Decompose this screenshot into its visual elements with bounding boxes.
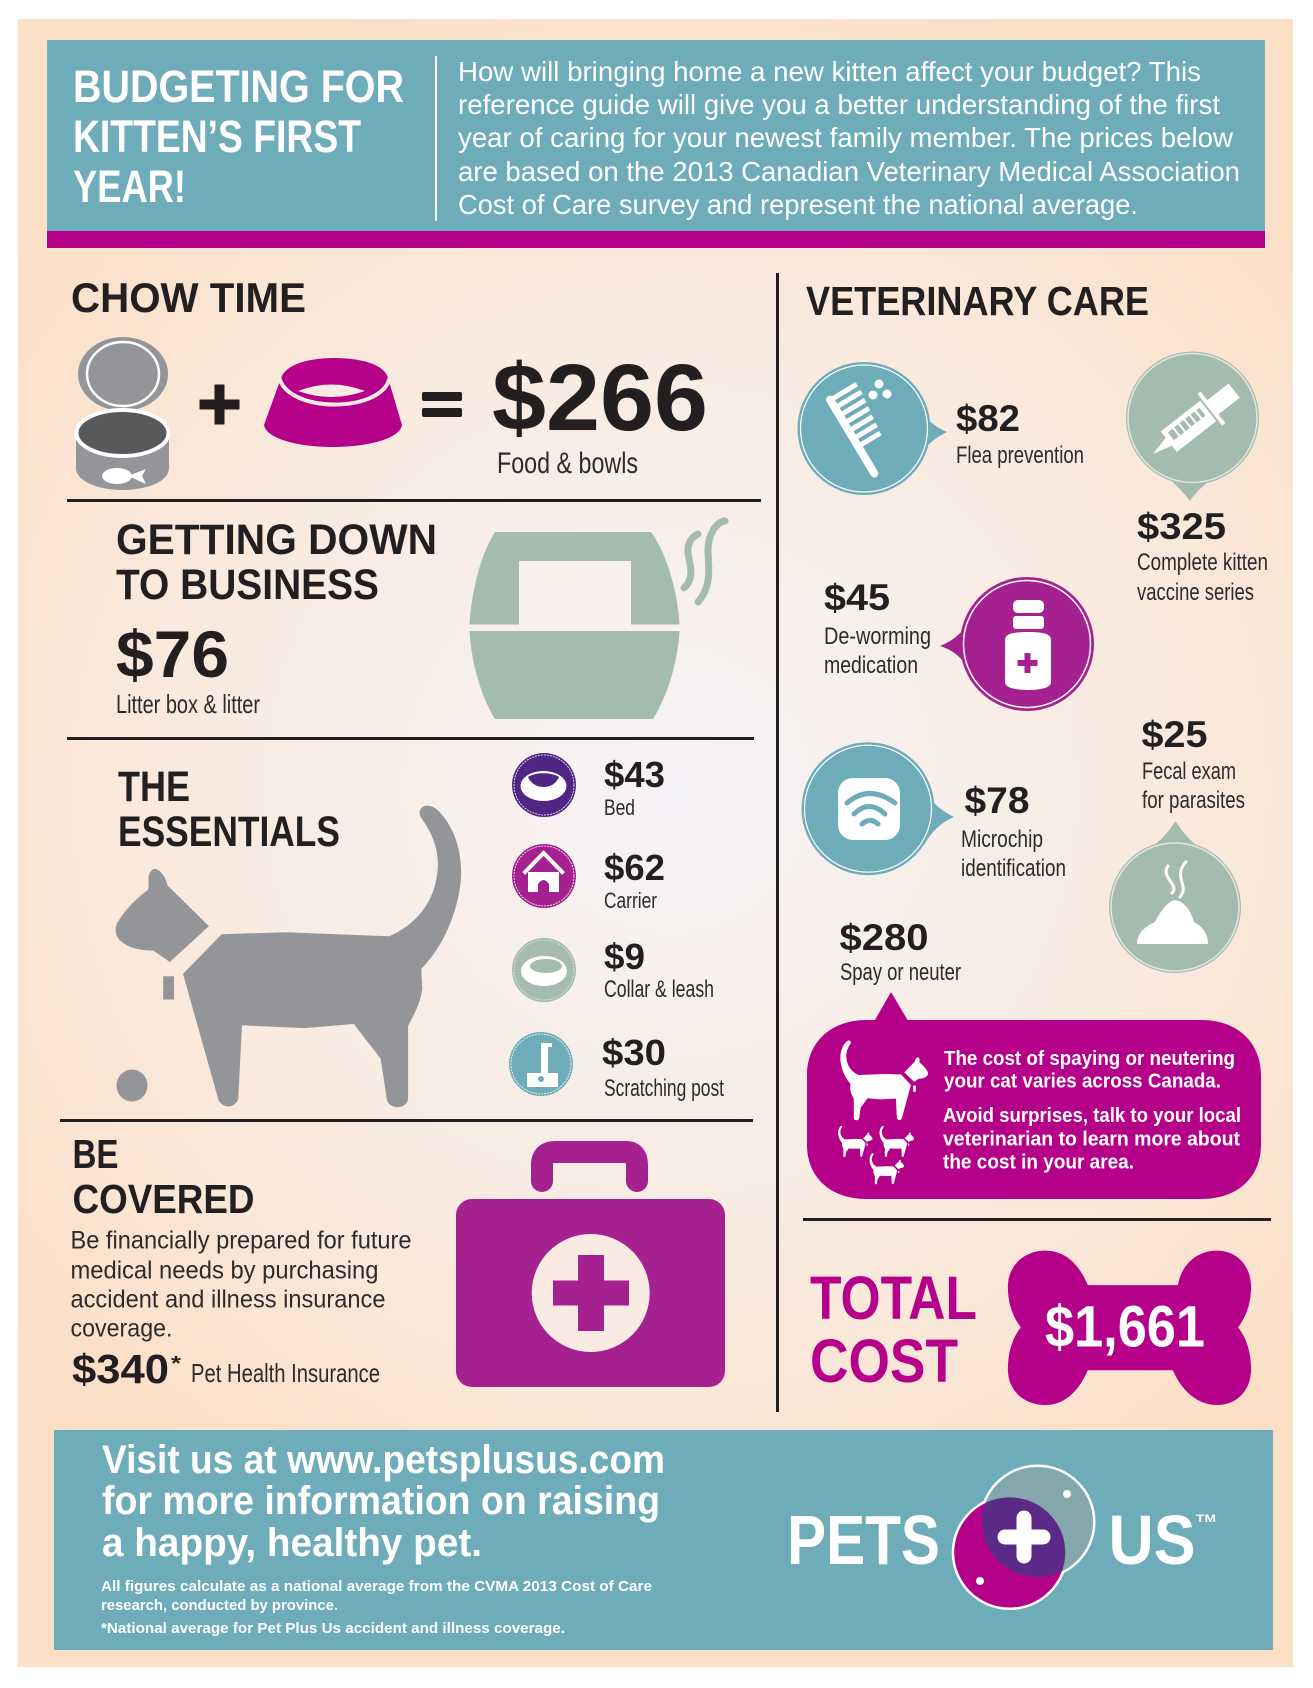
logo: pets plus us: TM <box>1196 1513 1216 1525</box>
text: insurance description: Be financially prepared for future <box>70 1226 412 1254</box>
icon: medical bag <box>456 1152 725 1387</box>
heading: be covered: COVERED <box>72 1176 254 1222</box>
logo: pets plus us: US <box>1108 1501 1196 1579</box>
text: website call to action: Visit us at www.petsplusus.com <box>102 1438 665 1482</box>
item: collar: $9 <box>604 936 645 977</box>
heading: total cost: TOTAL <box>810 1264 977 1332</box>
item: fecal exam: $25 <box>1142 714 1208 755</box>
item: bed <box>512 753 665 820</box>
text: callout message: The cost of spaying or neutering <box>944 1048 1235 1070</box>
heading: chow time: CHOW TIME <box>71 274 306 321</box>
icon: equals sign <box>422 392 462 417</box>
panel: total cost <box>810 1251 1251 1405</box>
text: website call to action <box>102 1438 665 1565</box>
item: flea prevention: Flea prevention <box>956 442 1084 469</box>
item: microchip <box>802 742 1066 882</box>
item: scratching post <box>509 1032 724 1102</box>
item: vaccine series <box>1126 352 1268 606</box>
panel: footer banner <box>54 1430 1273 1650</box>
item: microchip: $78 <box>964 780 1030 821</box>
item: de-worming medication <box>824 577 1094 711</box>
logo: pets plus us <box>787 1464 1216 1610</box>
item: de-worming medication: De-worming <box>824 623 931 650</box>
label: pet health insurance: Pet Health Insurance <box>191 1358 380 1388</box>
heading: getting down to business: TO BUSINESS <box>116 561 379 609</box>
panel: be covered <box>70 1131 725 1392</box>
icon: cat food can <box>76 337 169 490</box>
heading: the essentials <box>118 763 340 856</box>
intro text <box>458 56 1240 220</box>
text: callout message: the cost in your area. <box>943 1152 1134 1174</box>
item: collar <box>512 936 714 1003</box>
text: insurance description: accident and illness insurance <box>70 1286 386 1314</box>
item: fecal exam: for parasites <box>1142 787 1245 814</box>
intro text: reference guide will give you a better understanding of the first <box>458 89 1220 120</box>
text: insurance description: medical needs by purchasing <box>70 1256 378 1284</box>
heading: the essentials: THE <box>118 763 190 811</box>
intro text: year of caring for your newest family member. The prices below <box>458 122 1234 153</box>
divider: column rule <box>776 273 779 1412</box>
icon: plus sign <box>200 385 239 424</box>
item: carrier: Carrier <box>604 888 657 913</box>
footnote marker: * <box>171 1353 181 1375</box>
title: YEAR! <box>73 161 186 212</box>
panel: header banner <box>47 40 1265 248</box>
heading: veterinary care: VETERINARY CARE <box>806 278 1149 324</box>
panel: the essentials <box>116 753 724 1107</box>
title <box>73 61 404 212</box>
text: insurance description <box>70 1226 412 1342</box>
text: website call to action: for more information on raising <box>102 1479 660 1523</box>
item: de-worming medication: medication <box>824 652 918 679</box>
item: spay or neuter: Spay or neuter <box>840 959 961 986</box>
price: total: $1,661 <box>1045 1294 1205 1360</box>
text: footnotes: All figures calculate as a national average from the CVMA 2013 Cost of Care <box>101 1578 652 1595</box>
item: vaccine series: vaccine series <box>1137 579 1254 606</box>
item: carrier <box>512 844 665 913</box>
text: insurance description: coverage. <box>70 1314 172 1342</box>
text: callout message: veterinarian to learn more about <box>943 1128 1240 1150</box>
item: de-worming medication: $45 <box>824 577 890 618</box>
item: vaccine series: Complete kitten <box>1137 549 1268 576</box>
title: KITTEN’S FIRST <box>73 111 361 162</box>
item: fecal exam: Fecal exam <box>1142 758 1236 785</box>
label: food and bowls: Food & bowls <box>497 447 638 480</box>
panel: getting down to business <box>116 516 725 719</box>
logo: pets plus us: PETS <box>787 1501 940 1579</box>
heading: total cost: COST <box>810 1327 958 1395</box>
item: fecal exam <box>1109 714 1245 973</box>
item: microchip: Microchip <box>961 826 1043 853</box>
price: insurance: $340 <box>72 1346 169 1392</box>
text: callout message: Avoid surprises, talk to your local <box>943 1105 1241 1127</box>
item: microchip: identification <box>961 855 1066 882</box>
icon: bone <box>1008 1251 1251 1405</box>
item: flea prevention <box>798 362 1084 495</box>
text: callout message <box>943 1048 1241 1174</box>
heading: getting down to business: GETTING DOWN <box>116 516 437 564</box>
price: food: $266 <box>492 345 708 451</box>
icon: grey cat with collar <box>116 806 461 1107</box>
item: spay or neuter <box>840 917 961 986</box>
item: spay or neuter: $280 <box>840 917 928 958</box>
title: BUDGETING FOR <box>73 61 404 112</box>
text: callout message: your cat varies across Canada. <box>944 1070 1221 1092</box>
label: litter box: Litter box & litter <box>116 689 260 719</box>
heading: the essentials: ESSENTIALS <box>118 808 340 856</box>
price: litter: $76 <box>116 617 229 691</box>
heading: getting down to business <box>116 516 437 609</box>
intro text: Cost of Care survey and represent the national average. <box>458 189 1138 220</box>
icon: adult cat and kittens <box>838 1040 928 1184</box>
item: collar: Collar & leash <box>604 976 714 1003</box>
item: scratching post: $30 <box>602 1032 666 1073</box>
item: bed: Bed <box>604 795 635 820</box>
text: footnotes: *National average for Pet Plus Us accident and illness coverage. <box>101 1620 565 1637</box>
intro text: are based on the 2013 Canadian Veterinary Medical Association <box>458 156 1240 187</box>
item: scratching post: Scratching post <box>604 1075 724 1102</box>
item: bed: $43 <box>604 754 665 795</box>
intro text: How will bringing home a new kitten affect your budget? This <box>458 56 1201 87</box>
callout: spay or neuter cost <box>807 992 1261 1199</box>
text: website call to action: a happy, healthy pet. <box>102 1521 482 1565</box>
item: flea prevention: $82 <box>956 398 1020 439</box>
panel: veterinary care <box>798 278 1268 1199</box>
icon: pet bowl <box>264 358 402 447</box>
text: footnotes <box>101 1578 652 1637</box>
item: carrier: $62 <box>604 847 665 888</box>
heading: total cost <box>810 1264 977 1395</box>
panel: chow time <box>71 274 708 490</box>
heading: be covered: BE <box>72 1131 118 1177</box>
heading: be covered <box>72 1131 254 1222</box>
text: footnotes: research, conducted by province. <box>101 1597 338 1614</box>
item: vaccine series: $325 <box>1137 506 1226 547</box>
icon: litter box <box>470 521 725 719</box>
